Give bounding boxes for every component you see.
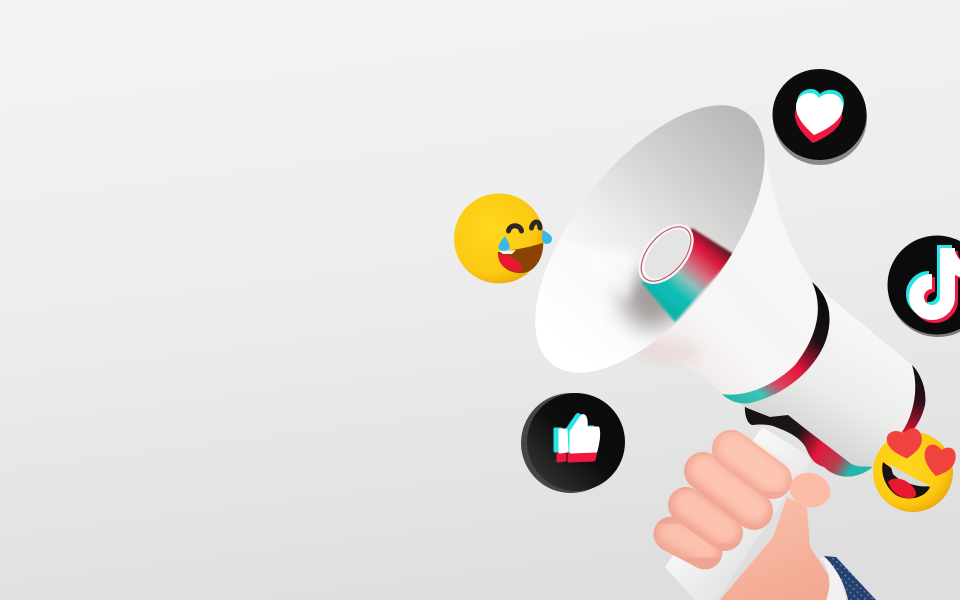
icon: thumbs up coin bbox=[521, 393, 625, 493]
cyan note bbox=[914, 245, 960, 309]
end ring bbox=[902, 365, 925, 436]
icon: heart-eyes emoji bbox=[873, 429, 956, 512]
tongue bbox=[888, 479, 916, 498]
coin edge bbox=[521, 393, 621, 493]
left heart eye bbox=[887, 429, 923, 459]
white note bbox=[916, 248, 960, 312]
icon: note logo coin bbox=[888, 236, 960, 337]
megaphone cylinder body bbox=[720, 285, 918, 467]
left tear bbox=[499, 236, 510, 251]
red note bbox=[920, 251, 960, 315]
teeth bbox=[499, 250, 516, 254]
coin edge bbox=[773, 71, 867, 165]
horn lower pink shade bbox=[636, 340, 700, 364]
inner tube bbox=[642, 228, 735, 322]
left eye bbox=[508, 226, 522, 231]
emoji face bbox=[873, 432, 953, 512]
right eye bbox=[532, 222, 540, 228]
right heart eye bbox=[922, 445, 956, 477]
emoji face bbox=[454, 194, 544, 284]
thumb bbox=[786, 468, 834, 512]
megaphone bbox=[520, 90, 925, 477]
interior shadow near tube bbox=[622, 268, 682, 328]
finger 3 bbox=[686, 503, 725, 533]
finger 2 bbox=[703, 469, 754, 511]
red thumb layer bbox=[558, 425, 597, 461]
white thumb bbox=[560, 416, 599, 452]
white cuff bbox=[820, 557, 846, 600]
red heart layer bbox=[795, 101, 842, 143]
palm bbox=[720, 497, 832, 600]
sleeve bbox=[820, 556, 876, 600]
horn outer body bbox=[580, 150, 822, 395]
icon: laughing emoji bbox=[454, 194, 552, 284]
open mouth bbox=[498, 243, 543, 273]
horn ring band bbox=[722, 282, 830, 403]
icon: heart coin bbox=[772, 69, 867, 165]
right tear bbox=[542, 230, 552, 244]
collar band under body bbox=[745, 404, 874, 477]
coin face bbox=[527, 393, 625, 491]
coin face bbox=[772, 69, 866, 160]
coin edge bbox=[888, 292, 960, 337]
finger 4 bbox=[671, 532, 705, 552]
navy jacket bbox=[824, 556, 876, 600]
handle bbox=[665, 427, 812, 600]
finger 1 bbox=[731, 447, 773, 480]
white heart bbox=[796, 93, 843, 135]
cyan thumb layer bbox=[555, 415, 594, 451]
hand bbox=[671, 447, 834, 600]
horn interior bbox=[535, 105, 765, 373]
tube cap bbox=[627, 214, 705, 294]
open mouth bbox=[882, 462, 930, 498]
cyan heart layer bbox=[797, 89, 844, 131]
interior shading bbox=[535, 105, 765, 373]
coin face bbox=[888, 236, 960, 334]
interior glare bbox=[611, 254, 639, 302]
tongue bbox=[498, 254, 522, 272]
teeth bbox=[890, 464, 930, 486]
